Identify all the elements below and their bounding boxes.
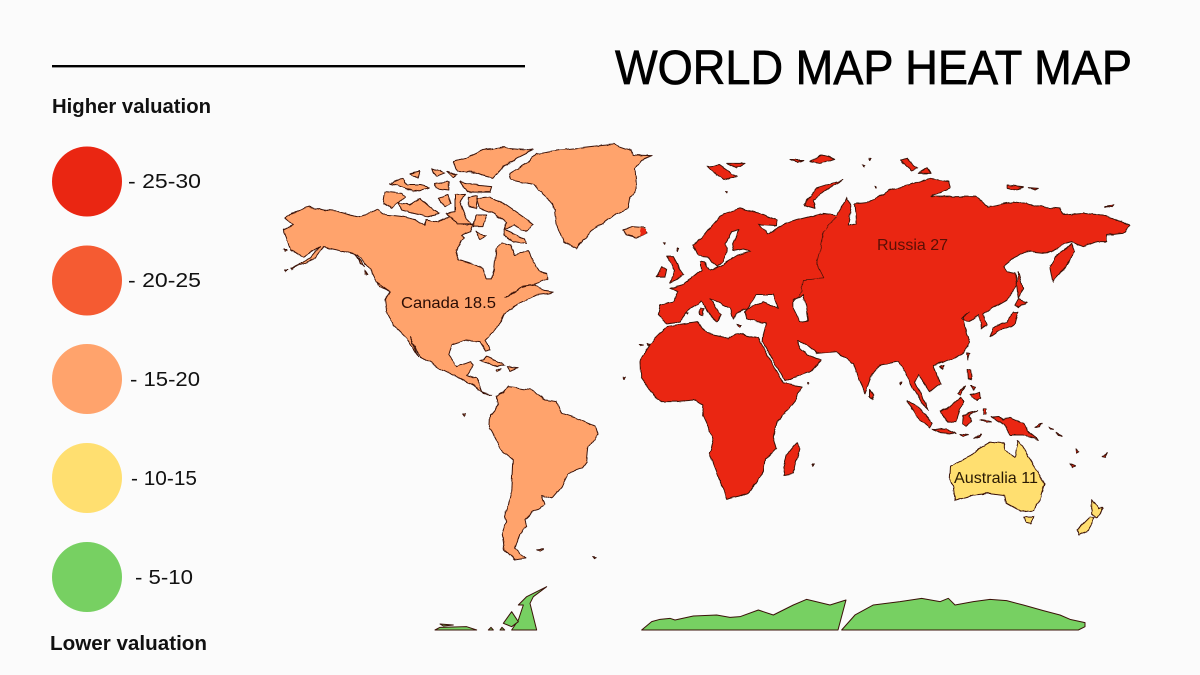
map region: Africa	[623, 322, 814, 499]
legend heading: higher valuation: Higher valuation	[52, 96, 211, 118]
map label: Canada: Canada 18.5	[401, 295, 496, 312]
map region: North America and Greenland	[283, 144, 652, 395]
map region: South America	[463, 387, 598, 560]
legend item 10-15: - 10-15	[131, 468, 197, 490]
legend item 15-20	[52, 344, 200, 414]
legend item 25-30	[52, 146, 201, 216]
legend item 5-10	[52, 542, 193, 612]
legend heading: lower valuation: Lower valuation	[50, 633, 207, 655]
map region: Antarctica	[435, 587, 1085, 630]
map region: Eurasia	[657, 155, 1130, 410]
continents with coastline roughness	[283, 144, 1130, 560]
title: WORLD MAP HEAT MAP	[615, 42, 1132, 95]
title rule	[52, 65, 525, 67]
legend item 25-30: - 25-30	[128, 171, 201, 193]
legend	[50, 96, 211, 655]
map region: Southeast Asia islands	[870, 353, 1107, 467]
legend item 5-10: - 5-10	[135, 567, 193, 589]
legend item 15-20: - 15-20	[130, 369, 200, 391]
map label: Russia: Russia 27	[877, 237, 948, 254]
legend item 20-25: - 20-25	[128, 270, 201, 292]
legend item 10-15	[52, 443, 197, 513]
map label: Australia: Australia 11	[954, 470, 1038, 487]
world map	[283, 144, 1130, 630]
map region: Australia and New Zealand	[949, 440, 1103, 535]
legend item 20-25	[52, 246, 201, 316]
